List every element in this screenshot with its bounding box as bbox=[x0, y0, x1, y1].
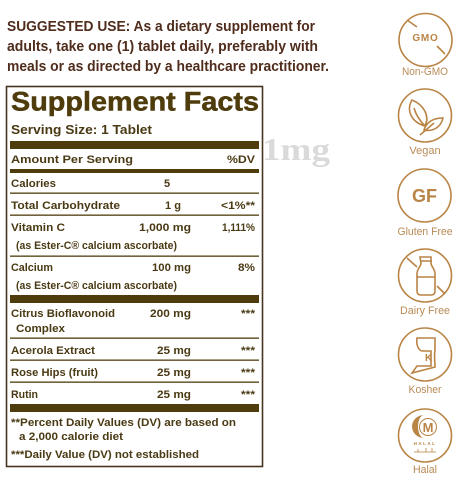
nutrient rows: *** bbox=[241, 389, 256, 401]
nutrient rows: Calcium bbox=[11, 262, 53, 274]
icon: gluten free: GF bbox=[412, 186, 437, 206]
footnotes: **Percent Daily Values (DV) are based on bbox=[11, 417, 236, 429]
icon: halal bbox=[398, 409, 452, 476]
table header: %DV bbox=[227, 154, 256, 166]
icon: halal: HALAL bbox=[414, 441, 436, 446]
icon: non-GMO bbox=[399, 14, 452, 78]
icon: halal: M bbox=[423, 420, 433, 435]
footnotes: ***Daily Value (DV) not established bbox=[11, 449, 199, 461]
icon: halal: Halal bbox=[413, 464, 437, 476]
suggested use text: meals or as directed by a healthcare practitioner. bbox=[7, 59, 329, 75]
nutrient rows: Rutin bbox=[11, 389, 38, 401]
nutrient rows: 1 g bbox=[165, 200, 181, 212]
icon: kosher: K bbox=[425, 353, 433, 364]
nutrient rows: 1,111% bbox=[222, 222, 255, 234]
nutrient rows: 25 mg bbox=[157, 389, 191, 401]
serving size: Serving Size: 1 Tablet bbox=[11, 123, 153, 137]
nutrient rows: 1,000 mg bbox=[139, 222, 191, 234]
nutrient rows: 100 mg bbox=[152, 262, 191, 274]
icon: dairy free: Dairy Free bbox=[400, 305, 450, 317]
suggested use text: adults, take one (1) tablet daily, preferably with bbox=[7, 39, 318, 55]
nutrient rows: *** bbox=[241, 345, 256, 357]
nutrient rows: 5 bbox=[164, 178, 170, 190]
nutrient rows: (as Ester-C® calcium ascorbate) bbox=[16, 280, 177, 292]
nutrient rows: Total Carbohydrate bbox=[11, 200, 120, 212]
icon: kosher bbox=[398, 328, 452, 396]
nutrient rows: Acerola Extract bbox=[11, 345, 95, 357]
nutrient rows: Complex bbox=[16, 323, 66, 335]
icon: non-GMO: GMO bbox=[412, 33, 439, 44]
nutrient rows: 200 mg bbox=[150, 308, 191, 320]
watermark: 1mg bbox=[262, 131, 330, 167]
nutrient rows: Calories bbox=[11, 178, 56, 190]
suggested use text bbox=[7, 19, 329, 75]
nutrient rows: Citrus Bioflavonoid bbox=[11, 308, 115, 320]
nutrient rows: Rose Hips (fruit) bbox=[11, 367, 98, 379]
icon: kosher: Kosher bbox=[408, 384, 442, 396]
nutrient rows: *** bbox=[241, 367, 256, 379]
nutrient rows: (as Ester-C® calcium ascorbate) bbox=[16, 240, 177, 252]
suggested use text: SUGGESTED USE: As a dietary supplement for bbox=[7, 19, 315, 35]
nutrient rows: Vitamin C bbox=[11, 222, 65, 234]
table header bbox=[11, 154, 256, 166]
footnotes bbox=[11, 417, 236, 461]
heading: supplement facts: Supplement Facts bbox=[11, 86, 259, 116]
icon: vegan bbox=[398, 89, 452, 157]
icon: dairy free bbox=[398, 249, 452, 317]
panel: supplement facts bbox=[6, 86, 262, 466]
nutrient rows: *** bbox=[241, 308, 256, 320]
nutrient rows: 25 mg bbox=[157, 367, 191, 379]
icon: vegan: Vegan bbox=[409, 145, 441, 157]
footnotes: a 2,000 calorie diet bbox=[19, 431, 123, 443]
nutrient rows: 8% bbox=[238, 262, 255, 274]
divider bars bbox=[10, 141, 259, 412]
icon: gluten free: Gluten Free bbox=[398, 226, 452, 238]
nutrient rows bbox=[11, 178, 256, 401]
nutrient rows: <1%** bbox=[221, 200, 256, 212]
nutrient rows: 25 mg bbox=[157, 345, 191, 357]
table header: Amount Per Serving bbox=[11, 154, 133, 166]
icon: gluten free bbox=[398, 169, 452, 238]
icon: non-GMO: Non-GMO bbox=[402, 66, 448, 78]
